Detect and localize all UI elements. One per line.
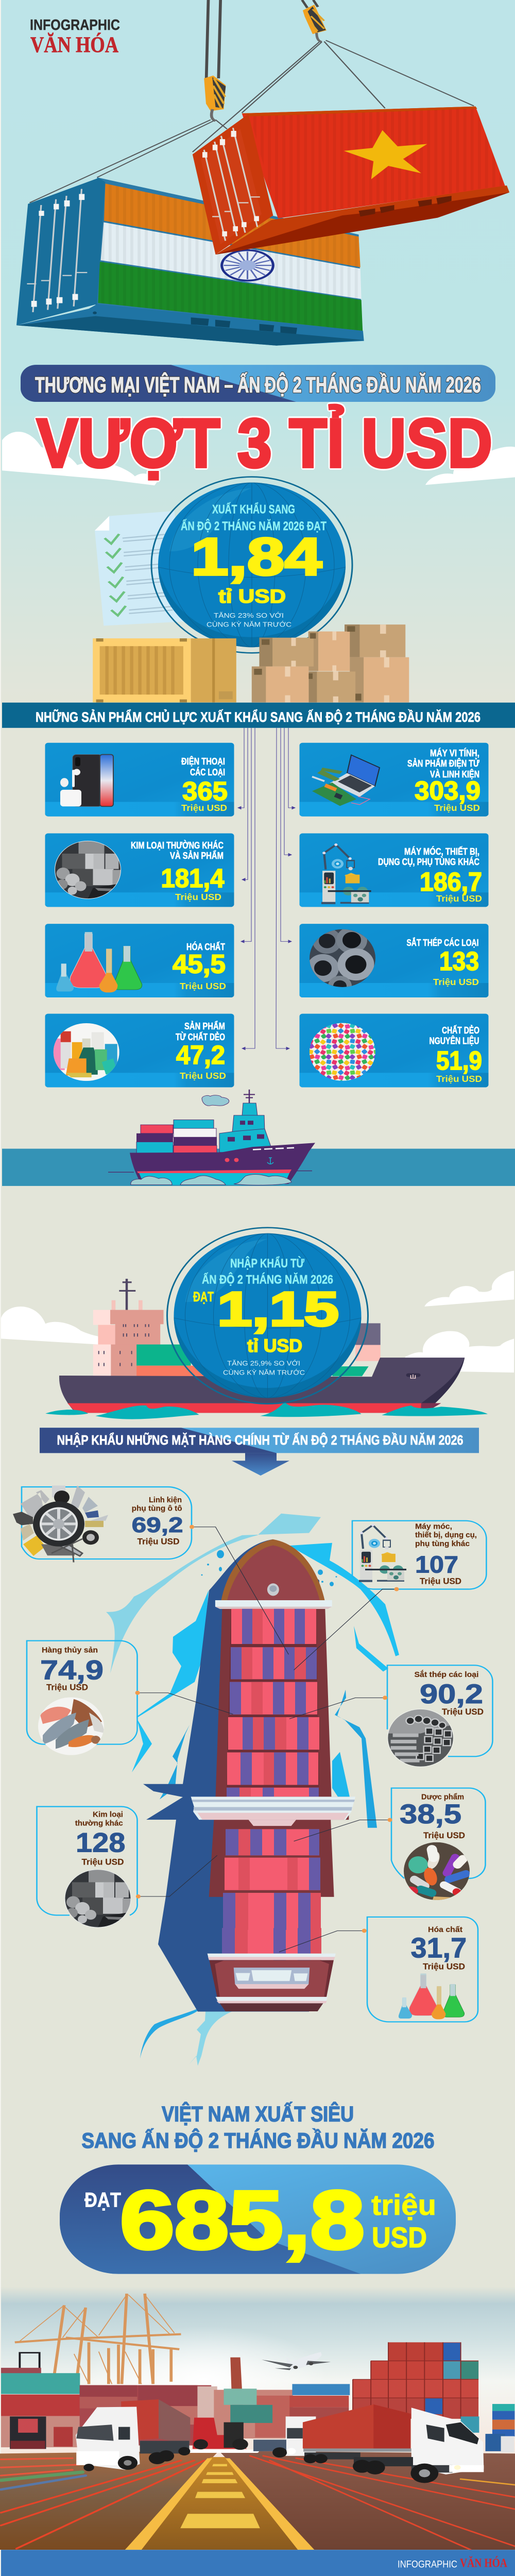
panel: machinery — [352, 1521, 486, 1589]
right container stacks — [214, 2342, 514, 2452]
panel: auto parts: phụ tùng ô tô — [132, 1504, 182, 1513]
card: plastic products: TỪ CHẤT DẺO — [176, 1031, 225, 1043]
icon: chemical flasks — [56, 932, 142, 992]
panel: chemicals: Triệu USD — [423, 1962, 465, 1971]
truck middle — [253, 2416, 316, 2458]
card: raw plastics: 51,9 — [436, 1046, 482, 1075]
container: india flag — [16, 177, 364, 346]
panel: chemicals: Hóa chất — [428, 1926, 463, 1934]
image: steel bundle — [388, 1709, 454, 1767]
panel: machinery: Triệu USD — [420, 1577, 461, 1586]
checklist document — [95, 511, 184, 625]
card: phones: 365 — [182, 776, 228, 806]
trade surplus pill — [60, 2164, 456, 2274]
card: base metals: KIM LOẠI THƯỜNG KHÁC — [131, 839, 224, 851]
panel: auto parts: Linh kiện — [149, 1496, 182, 1504]
road with light trails — [0, 2451, 515, 2550]
card: machinery — [300, 833, 488, 907]
panel: seafood: Triệu USD — [46, 1683, 88, 1692]
ashoka chakra wheel — [220, 249, 274, 281]
panel: steel: Triệu USD — [442, 1707, 484, 1717]
panel: pharmaceuticals — [391, 1788, 485, 1900]
card: phones — [45, 743, 234, 817]
card: machinery: 186,7 — [420, 868, 482, 896]
logo: infographic van hoa: VĂN HÓA — [30, 32, 118, 57]
card: raw plastics: CHẤT DẺO — [442, 1025, 479, 1036]
icon: robot arm machine — [321, 843, 371, 904]
card: phones: Triệu USD — [181, 803, 227, 813]
icon: steel coils — [310, 929, 375, 987]
card: computers and electronics: 303,9 — [415, 776, 480, 805]
card: computers and electronics: VÀ LINH KIỆN — [430, 768, 479, 780]
globe: import total: TĂNG 25,9% SO VỚI — [227, 1360, 300, 1367]
globe: import total: NHẬP KHẨU TỪ — [230, 1256, 305, 1270]
globe: export total: TĂNG 23% SO VỚI — [214, 612, 284, 619]
card: iron and steel: 133 — [439, 946, 479, 976]
icon: laptop and circuit board — [312, 755, 380, 806]
card: plastic products: 47,2 — [176, 1040, 225, 1070]
icon: household plastic bottles — [54, 1023, 119, 1081]
clouds around import globe — [1, 1271, 514, 1372]
panel: pharmaceuticals: Dược phẩm — [421, 1793, 464, 1801]
image: metal bars — [65, 1870, 132, 1927]
illustration: small cargo ship — [108, 1090, 315, 1185]
panel: auto parts: 69,2 — [132, 1513, 183, 1537]
trade surplus heading: VIỆT NAM XUẤT SIÊU — [162, 2102, 354, 2126]
panel: base metals: Kim loại — [93, 1811, 123, 1819]
card: base metals — [45, 833, 234, 907]
panel: base metals: Triệu USD — [81, 1857, 124, 1867]
card: base metals: VÀ SẢN PHẨM — [170, 850, 224, 861]
logo: infographic van hoa — [30, 16, 120, 57]
panel: seafood — [27, 1641, 138, 1755]
illustration: big cargo ship — [45, 1279, 488, 1419]
card: plastic products: SẢN PHẨM — [184, 1021, 225, 1032]
panel: machinery: 107 — [415, 1551, 458, 1578]
card: iron and steel — [300, 924, 488, 997]
panel: seafood: 74,9 — [40, 1655, 104, 1685]
left container stacks — [1, 2368, 217, 2449]
cargo crate and cardboard boxes — [93, 624, 409, 702]
icon: chemical flasks — [399, 1973, 465, 2019]
card: iron and steel: Triệu USD — [433, 977, 479, 987]
icon: plastic beads — [310, 1023, 375, 1081]
photo: logistics port with trucks — [0, 2286, 515, 2550]
card: base metals: 181,4 — [161, 863, 225, 893]
trade surplus pill: USD — [372, 2222, 427, 2253]
card: plastic products: Triệu USD — [180, 1071, 226, 1081]
stacked boxes — [252, 624, 409, 702]
banner: export products heading — [2, 703, 515, 728]
logo: infographic van hoa: INFOGRAPHIC — [30, 16, 120, 33]
panel: steel: 90,2 — [420, 1679, 483, 1709]
trade surplus heading — [81, 2102, 435, 2153]
icon: metal bars — [55, 841, 122, 899]
globe: import total: ẤN ĐỘ 2 THÁNG NĂM 2026 — [202, 1272, 333, 1286]
globe: import total: 1,15 — [217, 1282, 339, 1336]
panel: machinery: thiết bị, dụng cụ, — [415, 1531, 477, 1539]
trade surplus pill: triệu — [371, 2189, 436, 2221]
card: phones: ĐIỆN THOẠI — [181, 756, 225, 767]
trade surplus pill: 685,8 — [120, 2174, 365, 2266]
crane right with hook — [302, 0, 327, 42]
globe: export total: CÙNG KỲ NĂM TRƯỚC — [207, 620, 291, 628]
panel: auto parts: Triệu USD — [138, 1536, 180, 1546]
container rows — [222, 1609, 321, 1961]
icon: tyre and auto parts — [13, 1485, 108, 1562]
panel: pharmaceuticals: 38,5 — [400, 1799, 461, 1829]
panel: steel — [387, 1665, 492, 1767]
footer band with credit: INFOGRAPHIC — [398, 2559, 457, 2570]
panel: chemicals — [367, 1917, 478, 2022]
panel: base metals: 128 — [76, 1827, 126, 1858]
card: raw plastics — [300, 1014, 488, 1087]
cables of the india container — [30, 120, 227, 202]
panel: auto parts — [13, 1485, 192, 1562]
panel: base metals — [37, 1807, 138, 1927]
footer band with credit — [1, 2550, 515, 2576]
connector lines from banner to export cards — [238, 728, 295, 1050]
panel: machinery: phụ tùng khác — [415, 1540, 470, 1548]
panel: machinery: Máy móc, — [415, 1522, 452, 1531]
globe: export total: XUẤT KHẨU SANG — [212, 502, 295, 516]
container: vietnam flag — [193, 107, 509, 255]
panel: seafood: Hàng thủy sản — [42, 1647, 98, 1654]
illustration: india and vietnam containers on cranes — [16, 0, 509, 346]
forklift with green container — [193, 2358, 272, 2450]
panel: steel: Sắt thép các loại — [415, 1670, 479, 1679]
panel: pharmaceuticals: Triệu USD — [423, 1831, 465, 1840]
port cranes — [15, 2294, 181, 2384]
card: raw plastics: NGUYÊN LIỆU — [430, 1035, 479, 1046]
panel: base metals: thường khác — [75, 1819, 123, 1827]
card: computers and electronics: SẢN PHẨM ĐIỆN TỬ — [407, 757, 479, 769]
globe: export total — [151, 477, 352, 653]
card: phones: CÁC LOẠI — [190, 767, 225, 777]
water band under small ship — [2, 1149, 515, 1186]
card: machinery: MÁY MÓC, THIẾT BỊ, — [404, 845, 479, 857]
image: seafood — [38, 1697, 104, 1755]
card: chemicals: Triệu USD — [180, 981, 226, 991]
card: plastic products — [45, 1014, 234, 1087]
bridge deck and stern — [191, 1797, 355, 1826]
water wakes around big ship — [106, 1514, 399, 2066]
truck left — [76, 2399, 190, 2471]
globe: import total: CÙNG KỲ NĂM TRƯỚC — [223, 1369, 305, 1377]
airplane — [262, 2352, 331, 2370]
truck right — [303, 2404, 484, 2483]
card: machinery: Triệu USD — [436, 893, 482, 904]
illustration: ship seen from above — [143, 1539, 355, 2011]
banner: import heading with arrow — [40, 1428, 479, 1476]
card: base metals: Triệu USD — [175, 892, 221, 902]
wooden crate — [93, 638, 236, 702]
icon: phone and earbuds — [60, 755, 113, 806]
title bar — [21, 365, 495, 402]
globe: import total: tỉ USD — [247, 1335, 302, 1355]
card: raw plastics: Triệu USD — [436, 1074, 482, 1084]
trade surplus pill: ĐẠT — [84, 2189, 121, 2211]
card: computers and electronics: MÁY VI TÍNH, — [430, 748, 479, 759]
icon: robot arm machine — [359, 1524, 406, 1582]
cables of the vietnam container — [193, 40, 474, 152]
card: computers and electronics: Triệu USD — [434, 803, 480, 813]
leader lines and dots — [135, 1525, 399, 1952]
globe: export total: ẤN ĐỘ 2 THÁNG NĂM 2026 ĐẠT — [181, 519, 327, 533]
cloud left — [2, 432, 158, 485]
card: chemicals — [45, 924, 234, 997]
image: pills — [404, 1842, 471, 1900]
crane left with hook — [204, 0, 226, 121]
globe: import total — [167, 1228, 368, 1404]
globe: export total: tỉ USD — [218, 586, 286, 607]
card: iron and steel: SẮT THÉP CÁC LOẠI — [407, 937, 479, 948]
card: computers and electronics — [300, 743, 488, 817]
hull — [209, 1539, 349, 1897]
globe: import total: ĐẠT — [193, 1290, 214, 1304]
card: chemicals: 45,5 — [173, 950, 226, 979]
cloud right — [425, 447, 515, 485]
panel: chemicals: 31,7 — [411, 1933, 467, 1963]
card: chemicals: HÓA CHẤT — [186, 941, 225, 953]
globe: export total: 1,84 — [191, 527, 322, 586]
